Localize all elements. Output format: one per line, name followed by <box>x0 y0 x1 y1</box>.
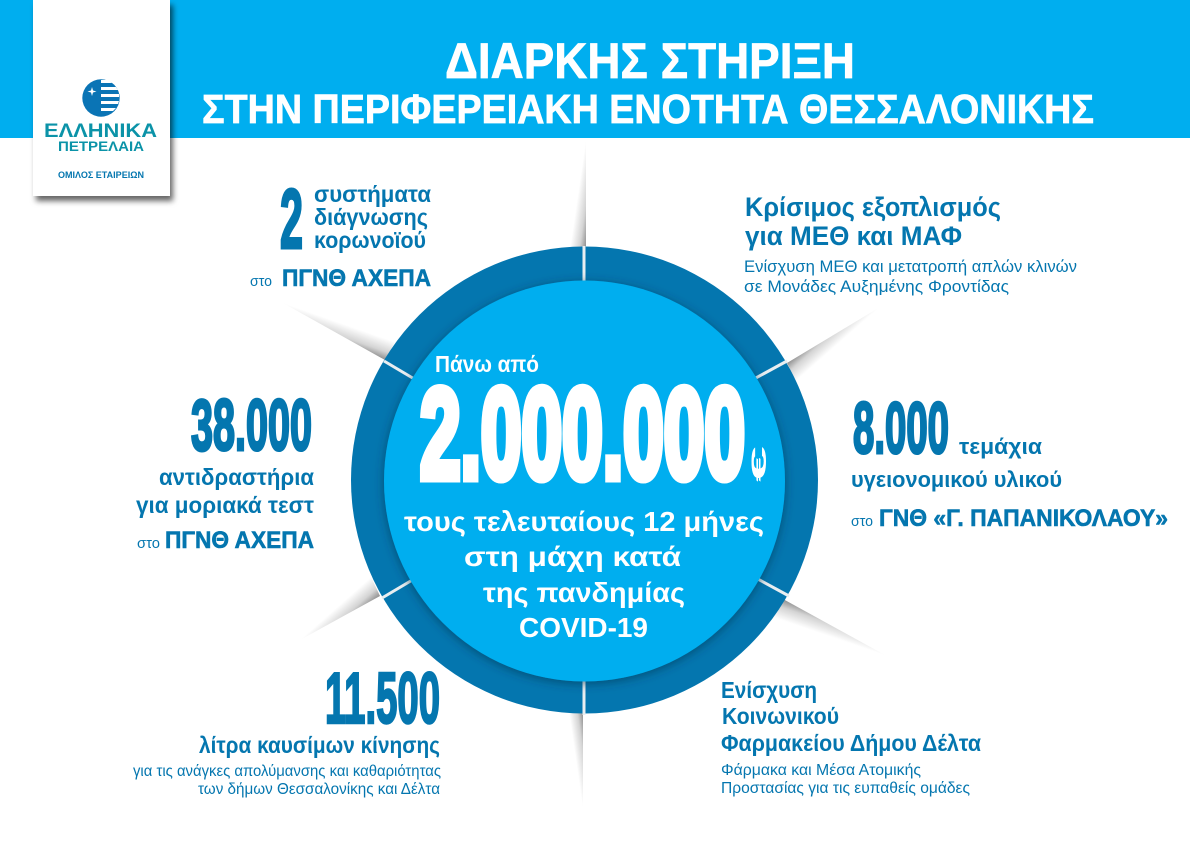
description <box>721 762 970 797</box>
title: ΔΙΑΡΚΗΣ ΣΤΗΡΙΞΗ <box>445 33 855 89</box>
panel: diagnostic systems <box>250 172 431 292</box>
euro sign: € <box>748 445 771 482</box>
description: Προστασίας για τις ευπαθείς ομάδες <box>721 780 970 797</box>
stat number: 38.000 <box>191 386 312 466</box>
divider rays <box>283 140 885 810</box>
lead text: Πάνω από <box>435 351 539 377</box>
heading: Κρίσιμος εξοπλισμός <box>745 192 1001 222</box>
outer ring <box>351 246 818 714</box>
description <box>133 763 441 798</box>
location: στο <box>851 513 873 530</box>
panel: social pharmacy <box>721 677 981 797</box>
icon: logo emblem <box>82 79 120 117</box>
circle caption: στη μάχη κατά <box>464 541 681 572</box>
location: ΠΓΝΘ ΑΧΕΠΑ <box>165 527 314 554</box>
heading <box>721 677 981 756</box>
location: ΓΝΘ «Γ. ΠΑΠΑΝΙΚΟΛΑΟΥ» <box>879 505 1168 532</box>
description: Φάρμακα και Μέσα Ατομικής <box>721 762 921 779</box>
logo subname: ΠΕΤΡΕΛΑΙΑ <box>58 139 144 154</box>
heading: Κοινωνικού <box>722 703 839 729</box>
stat number: 8.000 <box>853 389 949 469</box>
title: ΣΤΗΝ ΠΕΡΙΦΕΡΕΙΑΚΗ ΕΝΟΤΗΤΑ ΘΕΣΣΑΛΟΝΙΚΗΣ <box>202 86 1094 132</box>
description: των δήμων Θεσσαλονίκης και Δέλτα <box>198 781 440 798</box>
description: σε Μονάδες Αυξημένης Φροντίδας <box>744 277 1009 296</box>
description: υγειονομικού υλικού <box>851 467 1062 492</box>
panel: sanitary material <box>851 389 1168 532</box>
ring gaps <box>382 246 789 715</box>
circle caption: COVID-19 <box>519 612 648 643</box>
circle caption: της πανδημίας <box>483 577 685 608</box>
heading: Ενίσχυση <box>721 677 817 703</box>
description: κορωνοϊού <box>314 227 426 253</box>
panel: fuel <box>133 659 441 798</box>
heading: για ΜΕΘ και ΜΑΦ <box>745 221 962 251</box>
inner disc <box>384 280 785 682</box>
panel: critical equipment <box>744 192 1077 296</box>
description: διάγνωσης <box>314 204 428 230</box>
logo card <box>33 0 170 196</box>
stat number: 11.500 <box>325 659 440 739</box>
description <box>314 181 431 253</box>
circle caption <box>404 506 764 643</box>
central circle <box>351 246 818 715</box>
heading <box>745 192 1001 251</box>
description: Ενίσχυση ΜΕΘ και μετατροπή απλών κλινών <box>744 257 1077 276</box>
description: συστήματα <box>314 181 431 207</box>
heading: Φαρμακείου Δήμου Δέλτα <box>721 730 981 756</box>
location: ΠΓΝΘ ΑΧΕΠΑ <box>282 265 431 292</box>
description: για τις ανάγκες απολύμανσης και καθαριότητας <box>133 763 441 780</box>
panel: diagnostic systems: 2 <box>280 172 303 266</box>
header band <box>0 0 1190 138</box>
logo name: ΕΛΛΗΝΙΚΑ <box>44 121 157 142</box>
logo group label: ΟΜΙΛΟΣ ΕΤΑΙΡΕΙΩΝ <box>58 170 144 181</box>
description: αντιδραστήρια <box>159 464 314 490</box>
description: για μοριακά τεστ <box>136 492 314 518</box>
big number: 2.000.000 <box>420 363 745 506</box>
panel: reagents <box>136 386 314 554</box>
description <box>744 257 1077 296</box>
description: τεμάχια <box>959 434 1042 459</box>
location: στο <box>137 535 160 552</box>
heading: λίτρα καυσίμων κίνησης <box>199 732 440 758</box>
location: στο <box>250 273 272 290</box>
title <box>202 33 1094 132</box>
circle caption: τους τελευταίους 12 μήνες <box>404 506 764 537</box>
description <box>136 464 314 518</box>
description <box>851 434 1062 492</box>
